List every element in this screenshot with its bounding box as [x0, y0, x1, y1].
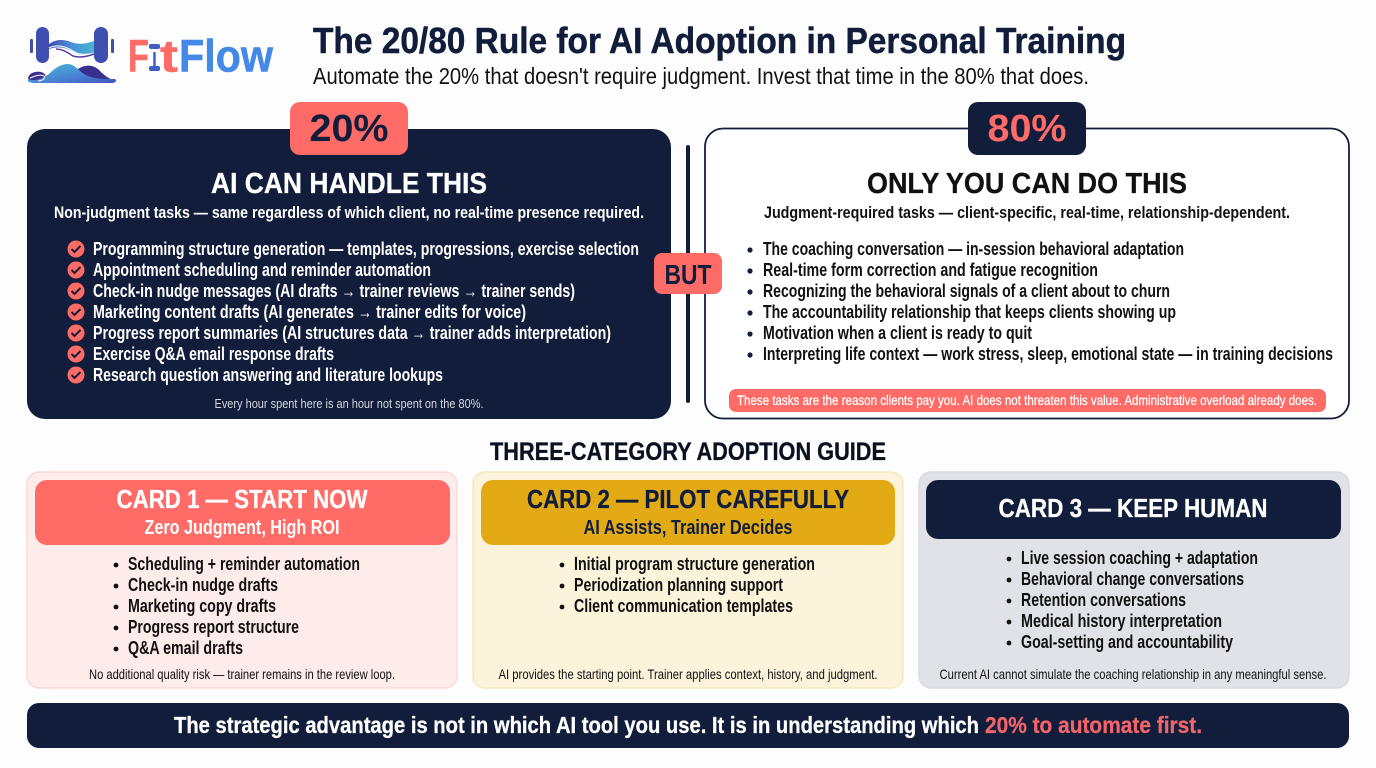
card header: [481, 480, 895, 545]
card header: CARD 1 — START NOW: [116, 484, 368, 514]
panel: 80% only you can do this: [705, 102, 1349, 418]
badge: BUT: [654, 253, 722, 294]
panel description: Judgment-required tasks — client-specific, real-time, relationship-dependent.: [764, 203, 1290, 222]
bullet list: Motivation when a client is ready to quit: [763, 323, 1032, 343]
card header: CARD 3 — KEEP HUMAN: [998, 493, 1268, 523]
checklist: Programming structure generation — templates, progressions, exercise selection: [93, 239, 639, 259]
badge: 20%: 20%: [310, 108, 388, 150]
checklist: Research question answering and literature lookups: [93, 365, 443, 385]
card list: Scheduling + reminder automation: [128, 554, 360, 574]
card header: AI Assists, Trainer Decides: [584, 517, 792, 539]
bullet list: The coaching conversation — in-session behavioral adaptation: [763, 239, 1184, 259]
card note: AI provides the starting point. Trainer applies context, history, and judgment.: [498, 666, 878, 682]
card list: Behavioral change conversations: [1021, 569, 1244, 589]
card list: Marketing copy drafts: [128, 596, 276, 616]
subtitle: Automate the 20% that doesn't require judgment. Invest that time in the 80% that does.: [313, 63, 1089, 89]
checklist: Progress report summaries (AI structures data → trainer adds interpretation): [93, 323, 611, 343]
panel description: Non-judgment tasks — same regardless of which client, no real-time presence required.: [54, 203, 644, 222]
checklist: Check-in nudge messages (AI drafts → trainer reviews → trainer sends): [93, 281, 575, 301]
card list: Initial program structure generation: [574, 554, 815, 574]
checklist: [68, 239, 639, 385]
bullet list: [747, 239, 1333, 364]
wordmark: [128, 30, 274, 82]
wordmark: F: [128, 30, 149, 82]
card list: Q&A email drafts: [128, 638, 243, 658]
card header: CARD 2 — PILOT CAREFULLY: [527, 484, 849, 514]
icon: dumbbell and waves: [28, 27, 116, 83]
card list: [1007, 548, 1258, 652]
wordmark: t: [160, 30, 178, 82]
card list: [114, 554, 360, 658]
panel: card 2 pilot carefully: [473, 472, 903, 688]
checklist: Marketing content drafts (AI generates → trainer edits for voice): [93, 302, 526, 322]
callout: [729, 389, 1326, 412]
card note: No additional quality risk — trainer remains in the review loop.: [89, 666, 395, 682]
card list: Retention conversations: [1021, 590, 1186, 610]
bullet list: The accountability relationship that keeps clients showing up: [763, 302, 1176, 322]
panel heading: ONLY YOU CAN DO THIS: [867, 168, 1187, 200]
logo: FitFlow: [28, 27, 274, 83]
bullet list: Real-time form correction and fatigue recognition: [763, 260, 1098, 280]
card list: Progress report structure: [128, 617, 299, 637]
panel: 20% AI can handle this: [27, 102, 671, 419]
card list: Client communication templates: [574, 596, 793, 616]
card header: [35, 480, 450, 545]
bottom banner: [27, 703, 1349, 748]
card list: Medical history interpretation: [1021, 611, 1222, 631]
bullet list: Recognizing the behavioral signals of a client about to churn: [763, 281, 1170, 301]
divider line: [686, 145, 690, 403]
card list: [560, 554, 815, 616]
badge: 80%: 80%: [988, 108, 1066, 150]
card list: Periodization planning support: [574, 575, 783, 595]
wordmark: Flow: [179, 30, 274, 82]
badge: 20%: [290, 102, 408, 155]
card list: Goal-setting and accountability: [1021, 632, 1233, 652]
panel: card 1 start now: [27, 472, 457, 688]
wordmark: i: [152, 38, 157, 79]
badge: 80%: [968, 102, 1086, 155]
card list: Check-in nudge drafts: [128, 575, 278, 595]
panel: card 3 keep human: [919, 472, 1349, 688]
card list: Live session coaching + adaptation: [1021, 548, 1258, 568]
checklist: Appointment scheduling and reminder automation: [93, 260, 431, 280]
title: The 20/80 Rule for AI Adoption in Personal Training: [313, 20, 1126, 61]
panel heading: AI CAN HANDLE THIS: [211, 168, 487, 200]
checklist: Exercise Q&A email response drafts: [93, 344, 334, 364]
badge: BUT: BUT: [664, 259, 712, 290]
card header: Zero Judgment, High ROI: [144, 517, 340, 539]
panel footnote: Every hour spent here is an hour not spent on the 80%.: [214, 396, 484, 411]
card header: [926, 480, 1341, 539]
bottom banner: The strategic advantage is not in which AI tool you use. It is in understanding which: [174, 712, 979, 738]
section heading: THREE-CATEGORY ADOPTION GUIDE: [490, 438, 886, 466]
bottom banner: 20% to automate first.: [985, 712, 1202, 738]
